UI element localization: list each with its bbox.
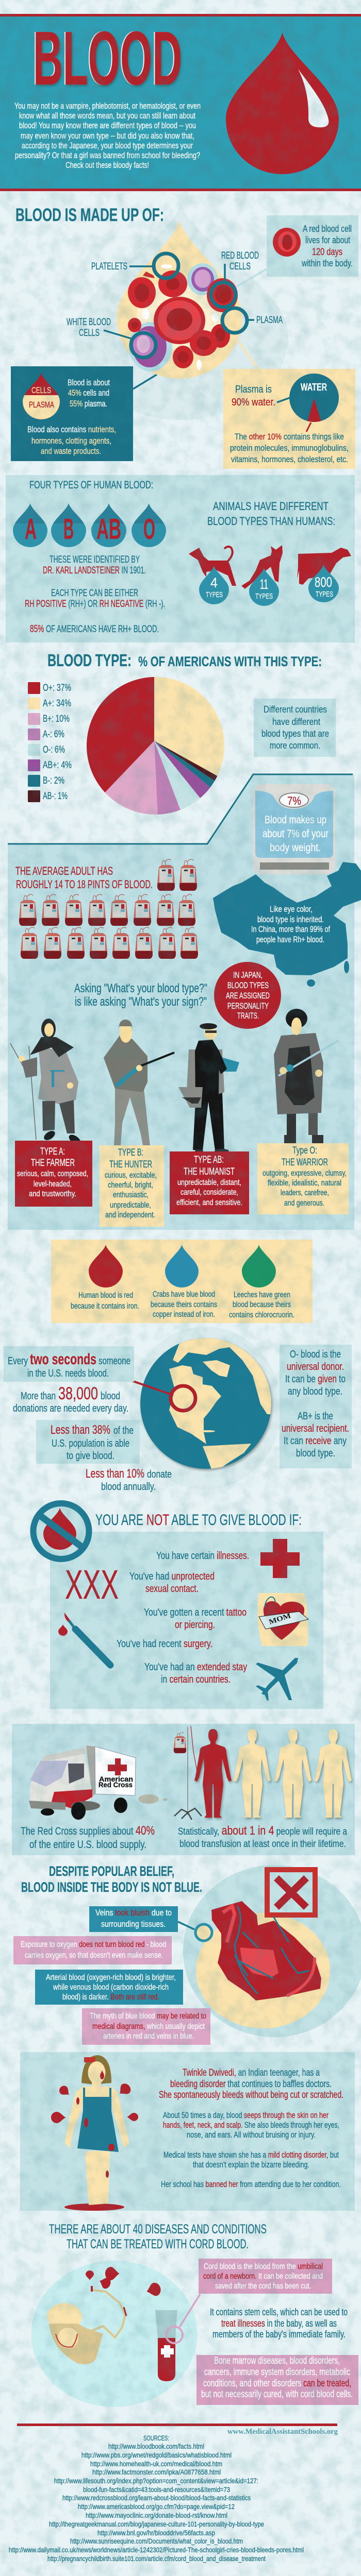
note: cord blood definition: cord of a newborn. It can be collected and (203, 2272, 323, 2281)
card: type B: enthusiastic, (113, 1191, 149, 1199)
icon: cat: TYPES (255, 592, 273, 601)
panel: twinkle dwivedi (20, 2052, 355, 2211)
callout: cord ring (166, 2294, 200, 2343)
stat: two seconds: two seconds (30, 1351, 96, 1368)
story paragraph one (159, 2067, 343, 2100)
sources list: http://www.americasblood.org/go.cfm?do=page.view&pid=12 (78, 2502, 235, 2511)
legend: AB+: 4% (43, 760, 72, 771)
callout: japan personality (214, 962, 281, 1029)
blood bags (19, 859, 198, 959)
heading: animals (207, 500, 335, 528)
panel: blood types (6, 475, 355, 642)
heading (49, 2222, 267, 2251)
blood type drops: O (143, 513, 155, 546)
icon: three other people (234, 1729, 352, 1818)
icon: bathroom scale: body weight. (270, 842, 321, 854)
figure: warrior (274, 1009, 338, 1144)
figure: farmer (10, 1019, 83, 1146)
panel: universal donor and recipient: AB+ is the (298, 1411, 333, 1422)
card: type AB: THE HUMANIST (184, 1166, 235, 1177)
landsteiner text: THESE WERE IDENTIFIED BY (50, 554, 140, 565)
heading: YOU ARE NOT ABLE TO GIVE BLOOD IF: (95, 1512, 302, 1529)
crab caption: copper instead of iron. (153, 1310, 215, 1319)
icon: falling drops (86, 2267, 162, 2298)
intro text: know what all those words mean, but you can still learn about (19, 111, 195, 121)
cell percentage text: 45% cells and (68, 388, 109, 398)
crab caption: because theirs contains (151, 1300, 217, 1309)
sources list: http://www.lifesouth.org/index.php?option=com_content&view=article&id=127: (54, 2477, 258, 2485)
stat: 38 percent: U.S. population is able (52, 1438, 129, 1449)
pints heading: THE AVERAGE ADULT HAS (15, 865, 113, 877)
stat: 38,000 donations: blood (101, 1391, 120, 1402)
note: arterial blood (35, 1970, 183, 2005)
note: veins look bluish: surrounding tissues. (101, 1919, 166, 1929)
stat: 38 percent: of the (113, 1425, 134, 1436)
blood type drops: B (63, 513, 74, 546)
leech caption (229, 1291, 294, 1319)
note: cord blood definition (199, 2259, 332, 2294)
blood type drops: A (25, 513, 37, 546)
icon: cat (241, 545, 283, 606)
other contents text: The other 10% contains things like (235, 432, 344, 442)
panel: universal donor and recipient: universal donor. (287, 1361, 344, 1372)
cell labels: WHITE BLOOD (67, 317, 111, 328)
sources list: http://www.pbs.org/wnet/redgold/basics/whatisblood.html (81, 2451, 232, 2459)
heading (47, 651, 322, 670)
card: type B: unpredictable, (110, 1201, 151, 1210)
legend: AB-: 1% (43, 791, 68, 802)
icon: bathroom scale: about 7% of your (262, 828, 329, 840)
card: type A: THE FARMER (31, 1158, 75, 1168)
sources list: http://pregnancychildbirth.suite101.com/article.cfm/cord_blood_and_disease_treatment (47, 2554, 266, 2563)
icon: cow (297, 548, 351, 602)
other contents text (230, 432, 349, 464)
card: type B: cheerful, bright, (108, 1181, 153, 1190)
callout: location ring (111, 1374, 195, 1411)
heading: BLOOD IS MADE UP OF: (15, 205, 164, 225)
tattoo text: You've gotten a recent tattoo (144, 1607, 247, 1618)
cell percentage text (68, 378, 110, 409)
title: BLOOD (33, 16, 182, 101)
pints heading (15, 865, 153, 891)
legend: B+: 10% (43, 714, 70, 724)
callout: different countries: more common. (270, 740, 320, 751)
stat: 38,000 donations (13, 1384, 128, 1414)
cell labels: PLASMA (256, 315, 283, 326)
intro text (14, 101, 201, 170)
cream ellipse (196, 1913, 330, 2028)
icon: blood drop (226, 32, 339, 174)
sources list: SOURCES: (143, 2434, 169, 2442)
icon: dog: 4 (210, 575, 218, 590)
unprotected contact text (129, 1571, 215, 1595)
panel: plasma is water (223, 369, 355, 469)
card: type O: and generous. (284, 1199, 324, 1208)
globe background (129, 1327, 282, 1489)
cell labels: CELLS (79, 328, 100, 338)
legend: O-: 6% (43, 744, 65, 755)
red cross stat: The Red Cross supplies about 40% (21, 1824, 155, 1838)
panel: red cross and transfusions (12, 1724, 355, 1855)
china text: people have Rh+ blood. (256, 935, 324, 944)
red cross stat (21, 1824, 155, 1851)
icon: crab blue drop (165, 1245, 199, 1287)
card: type B: TYPE B: (118, 1147, 143, 1158)
human caption (71, 1291, 139, 1311)
plasma text (232, 384, 275, 408)
note: arterial blood: while venous blood (carbon dioxide-rich (53, 1983, 169, 1992)
icon: dog: TYPES (206, 590, 223, 599)
note: myth (82, 2008, 210, 2045)
sources list: http://www.redcrossblood.org/learn-about-blood/blood-facts-and-statistics (62, 2494, 251, 2502)
heading (21, 1863, 202, 1895)
intro text: blood! You may know there are different types of blood -- you (19, 121, 196, 130)
icon: red cross truck (29, 1745, 168, 1820)
story paragraph one: Twinkle Dwivedi, an Indian teenager, has a (183, 2067, 320, 2078)
sources list: http://www.factmonster.com/ipka/A0877658.html (92, 2468, 221, 2476)
icon: cells and plasma drop: CELLS (31, 385, 51, 395)
landsteiner text (43, 554, 146, 576)
icon: globe (140, 1337, 273, 1473)
icon: airplane (256, 1658, 298, 1701)
panel: blood colors (51, 1240, 313, 1323)
china text: blood type is inherited. (257, 914, 324, 924)
icon: bathroom scale: 7% (287, 794, 301, 807)
icon: mom tattoo: MOM (268, 1612, 292, 1626)
connector lines (133, 269, 267, 389)
icon: scalpel (58, 1613, 110, 1665)
stem cells text (210, 2307, 348, 2340)
heading: BLOOD TYPE: (47, 651, 132, 670)
card: type A: serious, calm, composed, (17, 1170, 88, 1178)
legend: A+: 34% (43, 698, 71, 709)
sources list: http://www.bnl.gov/hr/blooddrive/56facts.asp (97, 2529, 215, 2537)
surgery text: You've had recent surgery. (117, 1638, 212, 1650)
stat: 10 percent (86, 1467, 172, 1493)
background ellipse (183, 1865, 361, 2037)
callout: japan personality: IN JAPAN, (233, 970, 262, 980)
stat: 38,000 donations: 38,000 (58, 1384, 98, 1403)
stat: 38 percent (36, 1420, 140, 1464)
legend (28, 682, 72, 802)
card: type O: THE WARRIOR (282, 1157, 328, 1168)
story paragraph two: About 50 times a day, blood seeps through the skin on her (163, 2110, 329, 2120)
note: arterial blood: blood) is darker. Both are still red. (62, 1993, 159, 2002)
panel background (50, 1532, 323, 1709)
china text: In China, more than 99% of (251, 924, 330, 934)
cell labels: CELLS (229, 261, 251, 272)
panel: red cell lifespan (267, 215, 358, 277)
note: oxygen (13, 1936, 172, 1964)
panel: universal donor and recipient: blood type. (296, 1448, 335, 1459)
unprotected contact text: sexual contact. (145, 1583, 199, 1595)
leech caption: Leeches have green (234, 1291, 290, 1299)
stem cells text: treat illnesses in the baby, as well as (221, 2318, 337, 2329)
callout: different countries: have different (272, 717, 320, 727)
tattoo text (144, 1607, 247, 1631)
card: type B (100, 1145, 164, 1227)
panel: cells and plasma (11, 366, 133, 461)
header banner (0, 14, 361, 191)
icon: no blood sign (33, 1503, 89, 1559)
contents text: Blood also contains nutrients, (27, 425, 116, 434)
intro text: Check out these bloody facts! (65, 160, 149, 170)
icon: xxx: XXX (65, 1562, 119, 1607)
callout: japan personality: ARE ASSIGNED (226, 991, 270, 1001)
card: type A (15, 1141, 92, 1207)
transfusion stat: Statistically, about 1 in 4 people will require a (178, 1824, 347, 1838)
icon: red cross (260, 1539, 300, 1578)
background drop (74, 204, 288, 420)
note: oxygen: Exposure to oxygen does not turn blood red - blood (21, 1940, 166, 1949)
heading: four types: FOUR TYPES OF HUMAN BLOOD: (29, 479, 153, 491)
extended stay text (144, 1662, 247, 1685)
card: type O: leaders, carefree, (281, 1189, 329, 1197)
crab caption: Crabs have blue blood (153, 1290, 215, 1299)
panel: universal donor and recipient: It can be given to (285, 1374, 346, 1385)
story paragraph three (163, 2150, 339, 2170)
story paragraph two (163, 2110, 339, 2140)
contents text: hormones, clotting agents, (31, 436, 111, 446)
stat: two seconds: in the U.S. needs blood. (27, 1368, 109, 1379)
section: blood is not blue (13, 1863, 361, 2045)
illustration: bleeding girl (51, 2055, 138, 2211)
asking text: is like asking "What's your sign?" (75, 995, 207, 1009)
crab caption (151, 1290, 217, 1319)
cell labels (67, 250, 283, 338)
card: type A: TYPE A: (40, 1146, 65, 1157)
red cross stat: of the entire U.S. blood supply. (29, 1839, 146, 1851)
china text: Like eye color, (270, 904, 313, 914)
icon: red cross truck: Red Cross (99, 1781, 133, 1789)
leech caption: blood because theirs (233, 1300, 291, 1309)
callout: japan personality: TRAITS. (237, 1011, 259, 1021)
icon: red blood cell (273, 228, 301, 257)
transfusion stat (178, 1824, 347, 1850)
china text (251, 904, 330, 944)
panel: universal donor and recipient: any blood type. (288, 1386, 342, 1397)
figure: hunter (104, 1020, 174, 1150)
card: type B: curious, excitable, (105, 1171, 157, 1180)
icon: transfusion patient (194, 1729, 232, 1818)
icon: cow: TYPES (316, 590, 333, 599)
heading: THAT CAN BE TREATED WITH CORD BLOOD. (67, 2237, 249, 2251)
section: blood type percentages (28, 654, 336, 815)
card: type A: and trustworthy. (29, 1190, 76, 1198)
tattoo text: or piercing. (175, 1619, 215, 1631)
stat: two seconds (4, 1346, 134, 1382)
lifespan text: 120 days (312, 247, 342, 258)
icon: iv stand (174, 1726, 202, 1820)
note: arterial blood: Arterial blood (oxygen-rich blood) is brighter, (46, 1973, 176, 1982)
heading: DESPITE POPULAR BELIEF, (49, 1863, 174, 1879)
illustration: fetus and cord (47, 2286, 126, 2364)
note: veins look bluish (89, 1906, 178, 1932)
extended stay text: You've had an extended stay (144, 1662, 247, 1673)
icon: leech green drop (242, 1245, 276, 1287)
icon: cat: 11 (260, 577, 268, 592)
cell percentage text: Blood is about (68, 378, 110, 387)
callout: different countries: blood types that are (261, 728, 329, 739)
heading: animals: ANIMALS HAVE DIFFERENT (213, 500, 329, 513)
contents text: and waste products. (41, 446, 101, 456)
cell percentage text: 55% plasma. (70, 399, 107, 409)
note: myth: medical diagrams, which usually depict (92, 2022, 205, 2031)
rh factor text: EACH TYPE CAN BE EITHER (51, 588, 138, 599)
heading: THERE ARE ABOUT 40 DISEASES AND CONDITIONS (49, 2222, 267, 2236)
card: type AB (170, 1151, 249, 1214)
title (32, 16, 182, 101)
heading: BLOOD INSIDE THE BODY IS NOT BLUE. (21, 1879, 202, 1895)
card: type AB: unpredictable, distant, (177, 1178, 241, 1187)
stat: 38,000 donations: More than (21, 1391, 56, 1402)
story paragraph three: Medical tests have shown she has a mild clotting disorder, but (163, 2150, 339, 2160)
extended stay text: in certain countries. (161, 1674, 231, 1685)
icon: cow: 800 (315, 574, 332, 590)
callout: different countries (254, 699, 336, 757)
asking text: Asking "What's your blood type?" (74, 981, 207, 995)
panel: universal donor and recipient (280, 1345, 352, 1468)
plasma text: Plasma is (235, 384, 272, 395)
intro text: may even know your own type -- but did you also know that, (21, 131, 194, 141)
card: type AB: efficient, and sensitive. (176, 1198, 242, 1207)
intro text: according to the Japanese, your blood type determines your (22, 141, 193, 150)
pints heading: ROUGHLY 14 TO 18 PINTS OF BLOOD. (16, 878, 153, 891)
rh factor text: RH POSITIVE (RH+) OR RH NEGATIVE (RH -). (25, 599, 165, 609)
sources list (9, 2434, 304, 2563)
stat: 10 percent: Less than 10% (86, 1467, 144, 1481)
asking text (74, 981, 207, 1009)
callout rings (104, 253, 254, 358)
card: type O: flexible, idealistic, natural (268, 1179, 341, 1188)
cell labels: PLATELETS (91, 261, 127, 272)
sources list: http://www.mayoclinic.org/donate-blood-rst/know.html (86, 2511, 227, 2519)
rh factor text (25, 588, 165, 609)
panel: universal donor and recipient: It can receive any (284, 1435, 347, 1447)
note: veins look bluish: Veins look bluish due to (95, 1908, 172, 1918)
leech caption: contains chlorocruorin. (229, 1311, 294, 1319)
pie icon: water (277, 374, 339, 432)
callout: japan personality: BLOOD TYPES (227, 980, 269, 990)
legend: A-: 6% (43, 729, 64, 740)
icon: china map (213, 862, 361, 987)
section: cord blood (31, 2222, 358, 2407)
contents text (27, 425, 116, 456)
intro text: You may not be a vampire, phlebotomist, or hematologist, or even (14, 101, 201, 111)
icon: human red drop (89, 1245, 123, 1287)
lifespan text (301, 224, 353, 268)
pie chart (87, 677, 224, 815)
icon: dog (189, 547, 236, 604)
section: blood is made up of (11, 204, 358, 469)
icon: mom tattoo (257, 1593, 308, 1646)
icon: x box (267, 1870, 315, 1915)
sources list: http://thegreatgeekmanual.com/blog/japanese-culture-101-personality-by-blood-type (49, 2520, 264, 2528)
icon: bathroom scale: Blood makes up (265, 814, 326, 826)
card: type AB: careful, considerate, (180, 1188, 238, 1197)
background circle (31, 2261, 197, 2407)
intro text: personality? Or that a girl was banned from school for bleeding? (15, 150, 200, 160)
stat: two seconds: someone (99, 1355, 130, 1367)
section: not able to give blood (33, 1503, 323, 1709)
blood type drops: AB (96, 513, 121, 546)
title: BLOOD (32, 16, 181, 101)
sources list: http://www.homehealth-uk.com/medical/blood.htm (90, 2460, 222, 2468)
footer (9, 2424, 338, 2563)
story paragraph two: nose, and ears. All without bruising or injury. (187, 2130, 316, 2140)
callout: vein ring (178, 1922, 212, 1941)
icon: bathroom scale (253, 784, 335, 874)
rh percentage text: 85% OF AMERICANS HAVE RH+ BLOOD. (30, 623, 159, 635)
stat: 38,000 donations: donations are needed every day. (13, 1403, 128, 1414)
note: myth: The myth of blue blood may be related to (90, 2012, 206, 2021)
panel: stepped panel with bags, map and personalities (8, 774, 361, 1230)
story paragraph three: that doesn't explain the bizarre bleeding. (193, 2160, 309, 2170)
note: myth: arteries in red and veins in blue. (103, 2032, 194, 2041)
figure: humanist (178, 1023, 239, 1153)
panel: universal donor and recipient: O- blood is the (290, 1349, 341, 1360)
icon: cells and plasma drop (23, 373, 60, 419)
legend: B-: 2% (43, 775, 64, 786)
plasma drop with cells (117, 220, 242, 379)
landsteiner text: DR. KARL LANDSTEINER IN 1901. (43, 565, 146, 576)
stat: 10 percent: blood annually. (101, 1481, 156, 1493)
card: type A: level-headed, (34, 1180, 72, 1189)
callout: japan personality: PERSONALITY (227, 1001, 269, 1011)
stat: 38 percent: to give blood. (67, 1450, 114, 1462)
blood type drops (13, 503, 166, 547)
stat: 10 percent: donate (147, 1469, 172, 1480)
sources list: http://www.sunriseequine.com/Documents/what_color_is_blood.htm (70, 2537, 243, 2545)
pie icon: water: WATER (301, 382, 327, 393)
note: oxygen: carries oxygen, so that doesn't even make sense. (25, 1951, 163, 1960)
icon: test tube (155, 2310, 177, 2381)
unprotected contact text: You've had unprotected (129, 1571, 215, 1582)
plasma text: 90% water. (232, 397, 275, 408)
human caption: because it contains iron. (71, 1302, 139, 1311)
note: treatable diseases (196, 2355, 358, 2405)
icon: red cross truck: American (99, 1775, 133, 1783)
card: type O (257, 1143, 349, 1214)
section: blood need statistics (4, 1327, 352, 1493)
card: type AB: TYPE AB: (194, 1155, 224, 1165)
icon: heart (211, 1901, 321, 2001)
site credit: www.MedicalAssistantSchools.org (227, 2428, 338, 2436)
stat: 38 percent: Less than 38% (51, 1423, 110, 1437)
stat: two seconds: Every (8, 1355, 28, 1367)
card: type O: Type O: (292, 1145, 317, 1156)
cell labels: RED BLOOD (221, 250, 259, 261)
card: type B: and independent. (105, 1211, 155, 1219)
sources list: http://www.bloodbook.com/facts.html (108, 2442, 204, 2450)
card: type B: THE HUNTER (109, 1159, 152, 1170)
legend: O+: 37% (43, 683, 71, 693)
sources list: blood-fun-facts&catid=43:tools-and-resources&Itemid=73 (83, 2485, 230, 2494)
note: cord blood definition: saved after the cord has been cut. (215, 2282, 311, 2291)
human caption: Human blood is red (78, 1291, 133, 1300)
note: cord blood definition: Cord blood is the blood from the umbilical (204, 2262, 323, 2271)
icon: cells and plasma drop: PLASMA (29, 400, 54, 410)
callout: different countries: Different countries (264, 704, 327, 715)
illnesses text: You have certain illnesses. (156, 1550, 249, 1562)
